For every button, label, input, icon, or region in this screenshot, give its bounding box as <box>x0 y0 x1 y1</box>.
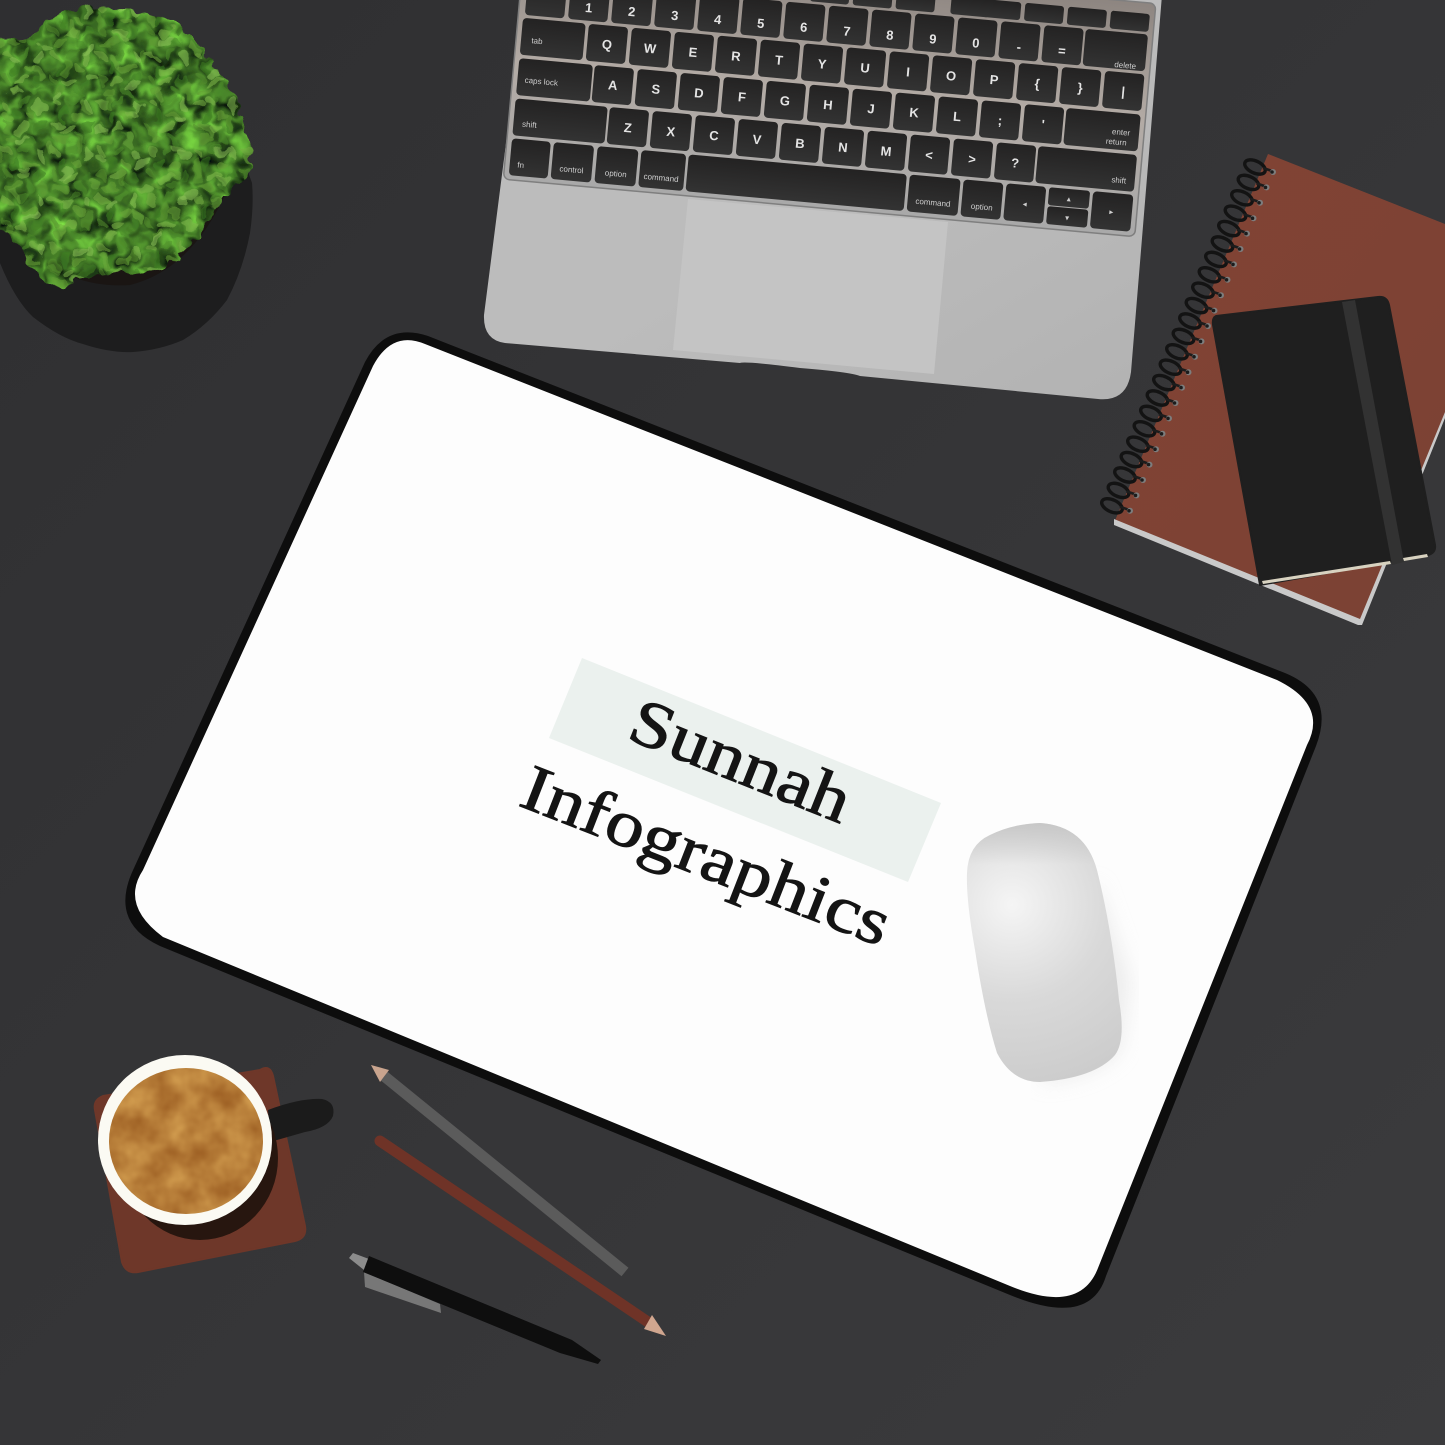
key legends: 7 <box>843 23 851 39</box>
title: Infographics: Infographics <box>512 751 901 961</box>
key legends: N <box>838 139 848 155</box>
pen body <box>363 1256 601 1364</box>
trackpad <box>673 199 948 374</box>
page edges <box>1114 412 1445 625</box>
plant in pot <box>0 6 253 352</box>
small key labels: ▴ <box>1066 194 1071 204</box>
key legends <box>574 0 1129 180</box>
key legends: ? <box>1010 155 1020 171</box>
mouse <box>967 823 1130 1082</box>
key legends: K <box>909 105 920 121</box>
key legends: 5 <box>757 16 765 31</box>
key legends: F <box>737 89 747 105</box>
key legends: 8 <box>886 27 894 43</box>
key legends: 4 <box>713 12 723 27</box>
small key labels: tab <box>531 36 543 46</box>
key legends: ; <box>997 113 1003 128</box>
key legends: S <box>651 81 661 97</box>
key legends: B <box>795 136 805 151</box>
pen clip <box>364 1272 441 1313</box>
key legends: = <box>1057 43 1067 59</box>
mouse shadow <box>1040 880 1130 1082</box>
key legends: X <box>666 124 676 140</box>
pencil tip <box>644 1315 666 1336</box>
key legends: V <box>752 132 762 147</box>
small key labels: control <box>559 164 584 175</box>
key legends: R <box>731 48 742 64</box>
pen cap <box>349 1253 369 1270</box>
pot <box>0 90 253 352</box>
mouse top shading <box>967 823 1122 1082</box>
key legends: 6 <box>800 19 808 35</box>
key legends: < <box>925 147 934 163</box>
coaster <box>95 1068 305 1272</box>
key legends: L <box>952 109 962 124</box>
laptop body <box>484 0 1162 399</box>
small key labels: enter <box>1112 127 1131 138</box>
small key labels: command <box>643 172 679 184</box>
soil <box>10 120 225 285</box>
small key labels <box>516 7 1138 227</box>
key legends: 2 <box>627 4 636 19</box>
laptop <box>484 0 1162 399</box>
key caps <box>509 0 1150 232</box>
foliage <box>0 6 249 286</box>
title: Sunnah: Sunnah <box>619 684 862 838</box>
small key labels: delete <box>1114 60 1137 71</box>
small key labels: fn <box>517 160 524 170</box>
keyboard <box>503 0 1156 237</box>
cup rim <box>98 1055 272 1225</box>
key legends: - <box>1016 39 1022 55</box>
key legends: Q <box>601 37 613 52</box>
key legends: ' <box>1041 117 1045 132</box>
cup body shadow <box>122 1076 278 1240</box>
key legends: } <box>1077 80 1083 95</box>
small key labels: command <box>915 197 951 209</box>
mat white surface <box>135 340 1313 1297</box>
key legends: J <box>867 101 875 116</box>
small key labels: ▾ <box>1065 213 1070 223</box>
black notebook <box>1213 297 1435 585</box>
cup handle <box>268 1099 334 1142</box>
small key labels: shift <box>1111 175 1127 186</box>
key legends: 0 <box>972 35 980 51</box>
small key labels: shift <box>522 120 538 130</box>
key legends: W <box>643 40 657 57</box>
key legends: P <box>989 72 999 88</box>
key legends: U <box>860 60 870 76</box>
leaf highlights <box>0 6 249 286</box>
pages <box>1262 561 1391 584</box>
leaf layer <box>0 6 249 286</box>
key legends: O <box>945 68 957 84</box>
small key labels: option <box>970 202 993 213</box>
pages right of band <box>1403 554 1428 561</box>
key legends: G <box>779 93 791 109</box>
sticker: highlight block <box>549 658 941 882</box>
red pencil <box>380 1141 666 1336</box>
key legends: H <box>823 97 833 113</box>
spiral binding <box>1099 157 1276 516</box>
pen <box>349 1253 601 1364</box>
key legends: { <box>1034 76 1040 91</box>
key legends: E <box>688 44 698 60</box>
coffee <box>109 1068 263 1214</box>
key legends: A <box>608 77 619 93</box>
desk mat <box>125 332 1322 1308</box>
small key labels: ◂ <box>1022 199 1027 209</box>
red spiral notebook <box>1099 154 1445 625</box>
key legends: Y <box>817 56 827 72</box>
small key labels: option <box>605 168 627 179</box>
keyboard well <box>503 0 1156 237</box>
small key labels: return <box>1105 137 1127 147</box>
key legends: C <box>709 128 720 144</box>
pencil tip <box>371 1065 389 1082</box>
key legends: | <box>1121 84 1126 99</box>
mouse body <box>967 823 1122 1082</box>
grey pencil <box>371 1065 625 1272</box>
mat black edge <box>125 332 1322 1308</box>
key legends: I <box>906 64 911 80</box>
small key labels: caps lock <box>524 76 559 88</box>
key legends: Z <box>623 120 633 136</box>
notebook cover <box>1213 297 1435 585</box>
key legends: T <box>774 52 784 68</box>
small key labels: ▸ <box>1109 207 1114 217</box>
key legends: > <box>968 151 977 167</box>
notebook cover <box>1114 154 1445 623</box>
key legends: M <box>880 143 892 159</box>
key legends: 3 <box>670 8 679 23</box>
key legends: 9 <box>929 31 937 47</box>
coffee on coaster <box>95 1055 334 1272</box>
key legends: D <box>694 85 704 101</box>
key legends: 1 <box>584 0 593 15</box>
elastic band <box>1342 300 1404 565</box>
